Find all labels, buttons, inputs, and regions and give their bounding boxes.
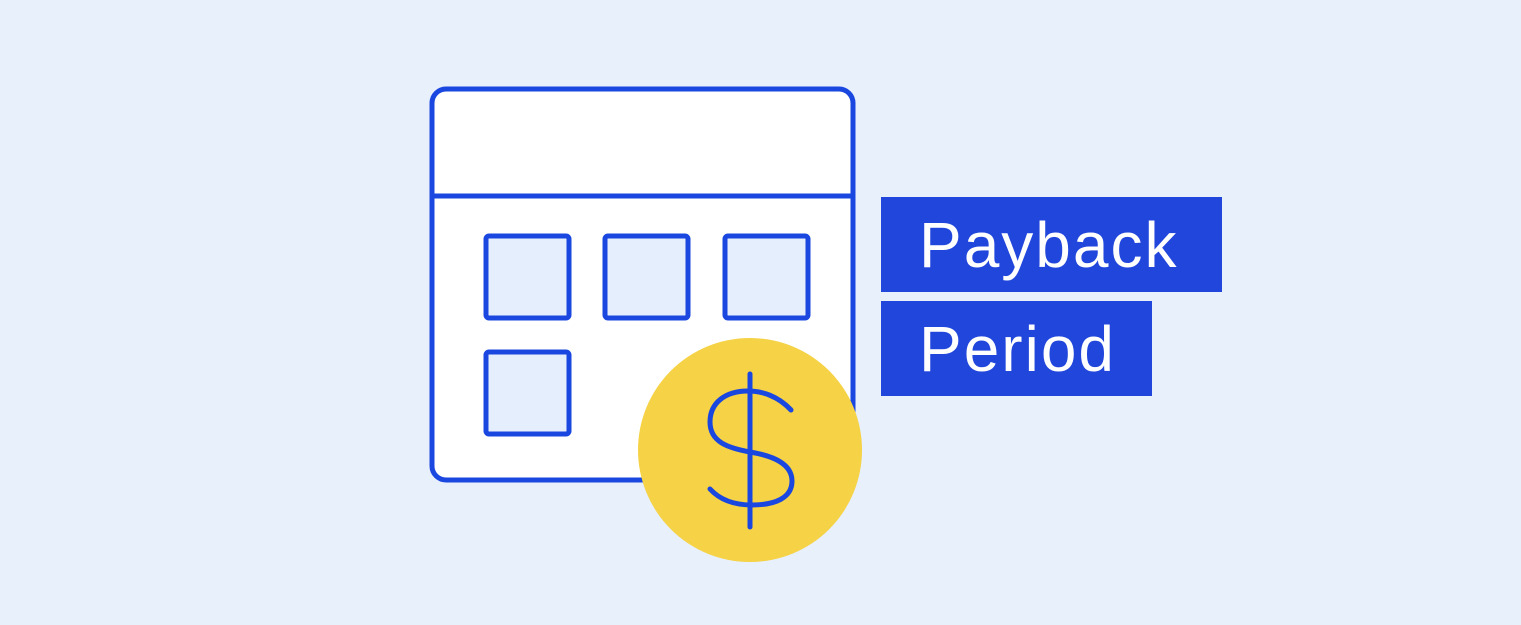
- label: Payback: [881, 197, 1222, 292]
- label: Period: [881, 301, 1152, 396]
- label: Payback: Payback: [919, 209, 1178, 281]
- label: Period: Period: [919, 313, 1116, 385]
- calendar: [432, 89, 853, 480]
- icon: dollar coin: [638, 338, 862, 562]
